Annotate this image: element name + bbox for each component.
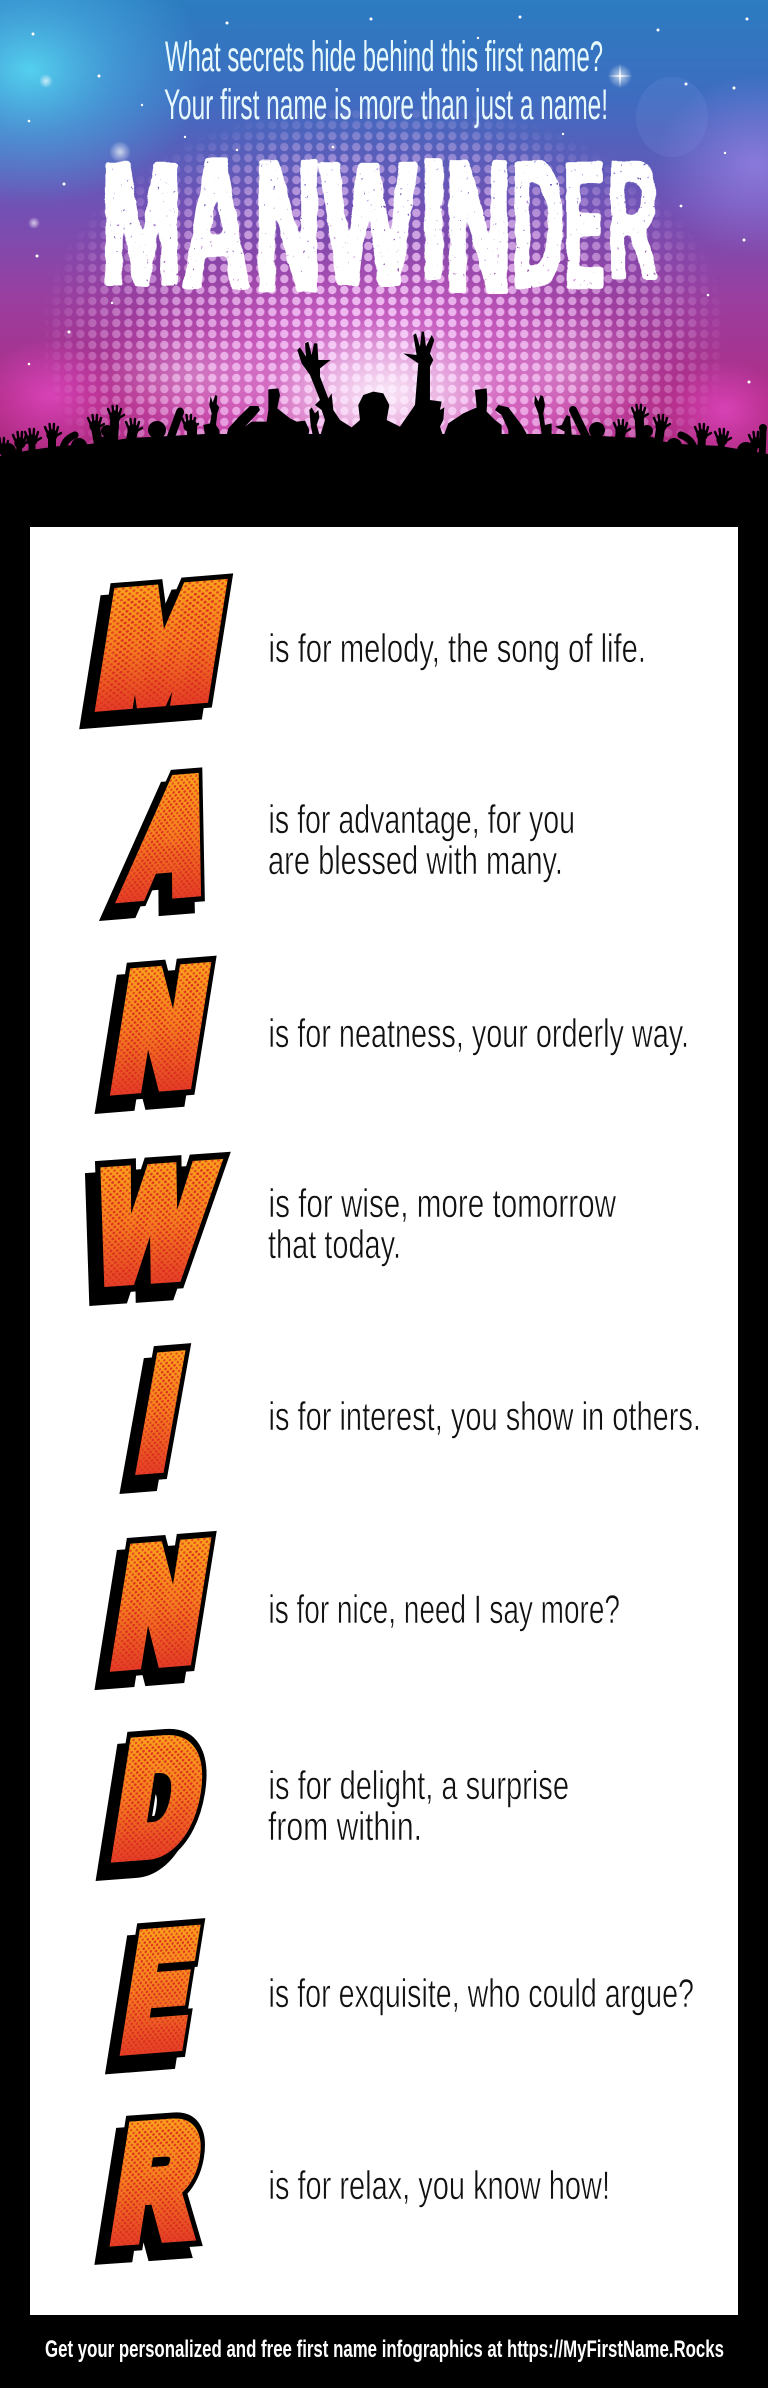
letter A row xyxy=(118,749,575,925)
letter M row xyxy=(93,559,646,731)
stars and sparkles xyxy=(28,16,750,384)
icon: comic letter W: W xyxy=(86,1137,218,1312)
icon: comic letter I: I xyxy=(131,1329,189,1497)
letter E row xyxy=(115,1902,694,2080)
title: name in distressed lettering: A xyxy=(182,120,250,329)
letter W row xyxy=(86,1137,616,1312)
icon: comic letter I: I xyxy=(131,1329,189,1497)
icon: comic letter W: W xyxy=(86,1137,218,1312)
letter D row xyxy=(108,1710,569,1884)
letter I row xyxy=(131,1329,701,1497)
title: name in distressed lettering xyxy=(102,119,657,333)
icon: comic letter D: D xyxy=(108,1710,211,1884)
title: name in distressed lettering: W xyxy=(322,126,416,323)
crowd silhouette xyxy=(0,332,768,530)
icon: comic letter N: N xyxy=(108,942,213,1116)
text: wise lines: that today. xyxy=(268,1223,401,1267)
title: name in distressed lettering: E xyxy=(565,122,603,327)
title: name in distressed lettering: D xyxy=(512,123,563,327)
icon: comic letter R: R xyxy=(106,2095,208,2268)
panel: white content area xyxy=(30,527,738,2315)
title: name in distressed lettering: R xyxy=(608,127,657,315)
concert background xyxy=(0,0,768,456)
icon: comic letter N: N xyxy=(108,1518,213,1693)
text: wise lines: is for wise, more tomorrow xyxy=(268,1182,616,1226)
icon: comic letter D: D xyxy=(108,1710,211,1884)
icon: comic letter I: I xyxy=(131,1329,189,1497)
text: advantage lines xyxy=(268,798,575,883)
text: delight lines: is for delight, a surprise xyxy=(268,1764,569,1808)
icon: comic letter E: E xyxy=(115,1902,204,2080)
letter R row xyxy=(106,2095,610,2268)
text: advantage lines: is for advantage, for you xyxy=(268,798,575,842)
black page background xyxy=(0,478,768,2388)
icon: comic letter D: D xyxy=(108,1710,211,1884)
title: name in distressed lettering: M xyxy=(102,126,181,324)
text: delight lines: from within. xyxy=(268,1805,422,1849)
header question text xyxy=(164,33,608,129)
text: nice line: is for nice, need I say more? xyxy=(268,1588,620,1632)
side crowd heads and bodies xyxy=(0,405,767,470)
icon: comic letter A: A xyxy=(118,749,226,925)
icon: comic letter E: E xyxy=(115,1902,204,2080)
central figures with raised hands xyxy=(193,332,577,483)
icon: comic letter R: R xyxy=(106,2095,208,2268)
text: advantage lines: are blessed with many. xyxy=(268,839,563,883)
icon: comic letter M: M xyxy=(93,559,229,731)
icon: comic letter E: E xyxy=(115,1902,204,2080)
title: name in distressed lettering: N xyxy=(446,119,511,333)
letter N row 2 xyxy=(108,1518,620,1693)
icon: comic letter M: M xyxy=(93,559,229,731)
icon: comic letter A: A xyxy=(118,749,226,925)
title: name in distressed lettering: I xyxy=(421,124,446,316)
icon: comic letter M: M xyxy=(93,559,229,731)
text: delight lines xyxy=(268,1764,569,1849)
letter N row xyxy=(108,942,689,1116)
text: wise lines xyxy=(268,1182,616,1267)
icon: comic letter N: N xyxy=(108,942,213,1116)
side crowd arms xyxy=(18,410,763,462)
icon: comic letter A: A xyxy=(118,749,226,925)
icon: comic letter N: N xyxy=(108,1518,213,1693)
icon: comic letter N: N xyxy=(108,1518,213,1693)
text: relax line: is for relax, you know how! xyxy=(268,2164,610,2208)
icon: comic letter R: R xyxy=(106,2095,208,2268)
icon: comic letter W: W xyxy=(86,1137,218,1312)
icon: comic letter N: N xyxy=(108,942,213,1116)
title: name in distressed lettering: N xyxy=(255,119,321,333)
